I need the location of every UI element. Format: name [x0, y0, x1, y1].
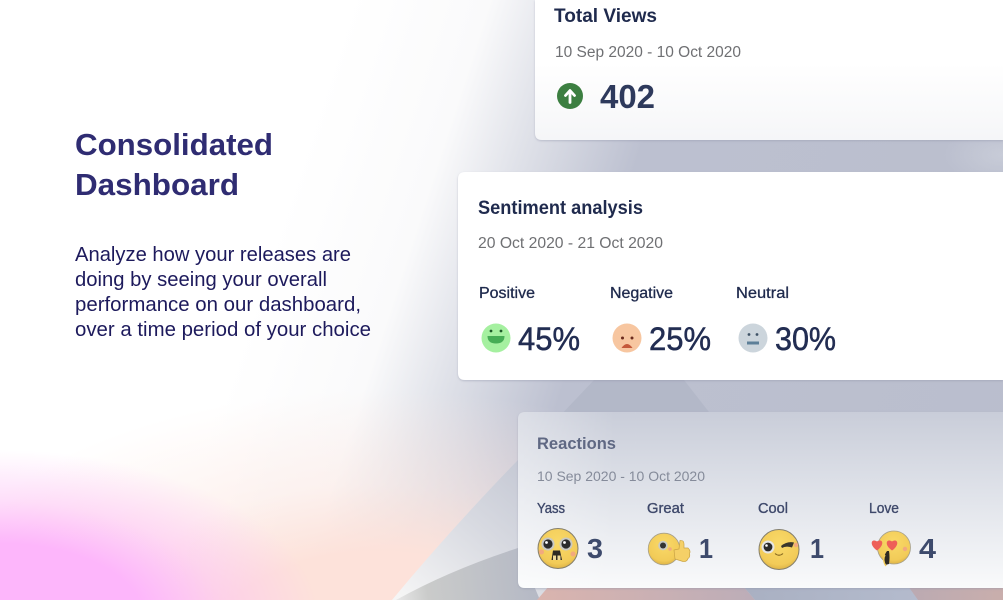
total views heading: Total Views — [554, 6, 657, 27]
sentiment labels: Negative — [610, 285, 673, 302]
description — [75, 244, 371, 341]
reaction labels: Yass — [537, 501, 565, 517]
reaction labels — [537, 501, 899, 517]
description: Analyze how your releases are — [75, 244, 351, 266]
sentiment labels: Positive — [479, 285, 535, 302]
sentiment date range: 20 Oct 2020 - 21 Oct 2020 — [478, 235, 663, 252]
total views value: 402 — [600, 78, 655, 115]
icon: green up arrow — [557, 83, 583, 109]
title — [75, 127, 273, 202]
panel: total views — [535, 0, 1003, 140]
positive value: 45% — [518, 321, 580, 357]
icon: yass emoji — [538, 528, 578, 568]
icon: negative face — [612, 324, 642, 352]
description: over a time period of your choice — [75, 319, 371, 341]
panel: reactions — [518, 412, 1003, 588]
yass value: 3 — [587, 533, 603, 564]
icon: cool emoji — [759, 530, 799, 570]
reaction labels: Love — [869, 501, 899, 517]
reaction labels: Cool — [758, 501, 788, 517]
sentiment labels — [479, 285, 789, 302]
sentiment labels: Neutral — [736, 285, 789, 302]
description: performance on our dashboard, — [75, 294, 361, 316]
icon: great emoji — [648, 533, 690, 565]
reactions date range: 10 Sep 2020 - 10 Oct 2020 — [537, 468, 705, 484]
icon: neutral face — [738, 324, 768, 352]
title: Dashboard — [75, 167, 239, 202]
panel: sentiment analysis — [458, 172, 1003, 380]
great value: 1 — [699, 533, 713, 564]
reactions heading: Reactions — [537, 434, 616, 453]
icon: positive face — [482, 324, 510, 352]
negative value: 25% — [649, 321, 711, 357]
love value: 4 — [919, 533, 936, 564]
sentiment heading: Sentiment analysis — [478, 198, 643, 219]
icon: love emoji — [872, 531, 910, 566]
reaction labels: Great — [647, 501, 684, 517]
neutral value: 30% — [775, 321, 836, 357]
description: doing by seeing your overall — [75, 269, 327, 291]
title: Consolidated — [75, 127, 273, 162]
cool value: 1 — [810, 533, 824, 564]
total views date range: 10 Sep 2020 - 10 Oct 2020 — [555, 44, 741, 61]
